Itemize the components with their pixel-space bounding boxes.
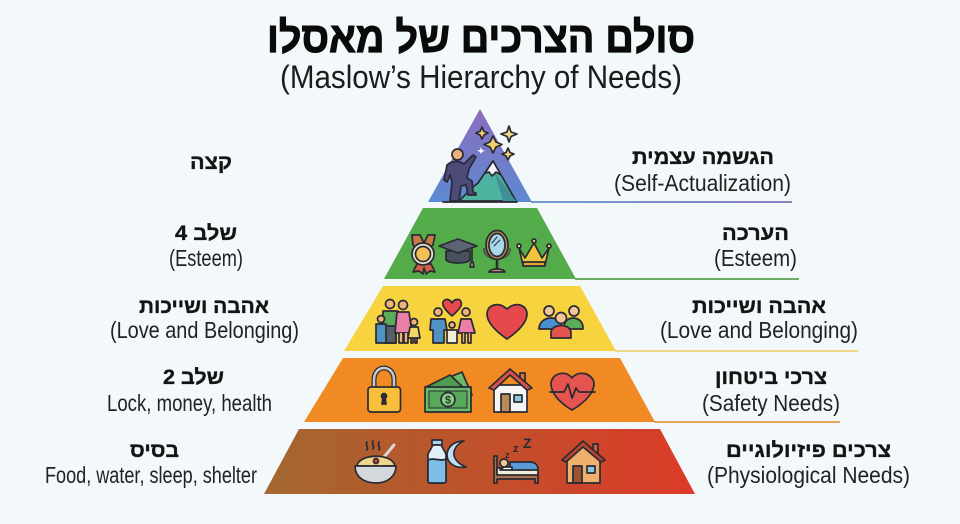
icon: house [489, 369, 532, 412]
icon: padlock [368, 368, 400, 412]
leader line: safety [654, 421, 840, 423]
icon: bed with sleeper: z [513, 443, 519, 455]
left caption: esteem: (Esteem) [169, 245, 243, 271]
right caption: safety needs: (Safety Needs) [702, 390, 840, 416]
icon: parents and child with heart [430, 299, 475, 343]
leader line: love [615, 350, 858, 352]
right caption: physiological needs: (Physiological Needs) [707, 462, 910, 488]
right labels [614, 146, 910, 488]
right label: self-actualization: הגשמה עצמית [632, 146, 774, 169]
right label: safety: צרכי ביטחון [715, 366, 827, 389]
pyramid tier: esteem [384, 208, 576, 279]
left caption: food water sleep shelter: Food, water, sleep, shelter [45, 462, 257, 488]
icon: group of people [539, 306, 583, 338]
left labels [45, 151, 299, 488]
title: סולם הצרכים של מאסלו [267, 14, 695, 62]
icon: mirror [484, 230, 510, 272]
right caption: esteem: (Esteem) [714, 245, 797, 271]
icon: graduation cap [439, 239, 477, 267]
pyramid tier: love and belonging [344, 286, 616, 351]
right label: physiological: צרכים פיזיולוגיים [726, 439, 891, 462]
left label: base: בסיס [130, 439, 179, 462]
subtitle: (Maslow’s Hierarchy of Needs) [280, 59, 682, 95]
icon: bed with sleeper [494, 435, 538, 483]
pyramid tier: self-actualization [428, 109, 532, 202]
icon: crescent moon [447, 441, 466, 467]
icon: big heart [487, 305, 527, 339]
icon: bed with sleeper: Z [523, 435, 532, 451]
right label: esteem: הערכה [722, 222, 789, 245]
icon: medal [412, 235, 435, 274]
icon: money [425, 372, 472, 412]
icon: water bottle [428, 440, 446, 483]
leader line: self-actualization [531, 201, 792, 203]
icon: climbing person [444, 149, 476, 201]
icon: stars [476, 126, 517, 160]
left label: peak: קצה [190, 151, 232, 174]
pyramid tier: physiological needs [264, 429, 695, 494]
right caption: self-actualization: (Self-Actualization) [614, 170, 791, 196]
left label: step 4: שלב 4 [175, 222, 237, 245]
icon: crown [517, 239, 551, 266]
icon: shelter house [562, 441, 605, 483]
right caption: love and belonging: (Love and Belonging) [660, 317, 858, 343]
icon: bed with sleeper: z [505, 450, 510, 460]
icon: bowl of food [355, 441, 396, 483]
left label: love and belonging: אהבה ושייכות [139, 295, 269, 318]
icon: family [376, 300, 420, 343]
icon: money: $ [445, 394, 451, 406]
right label: love and belonging: אהבה ושייכות [692, 295, 826, 318]
icon: heart with pulse [550, 373, 595, 410]
left caption: love and belonging: (Love and Belonging) [110, 317, 299, 343]
left label: step 2: שלב 2 [163, 366, 224, 389]
icon: mountain [443, 161, 517, 202]
left caption: lock money health: Lock, money, health [107, 390, 272, 416]
leader line: esteem [575, 278, 799, 280]
pyramid tier: safety needs [304, 358, 655, 422]
